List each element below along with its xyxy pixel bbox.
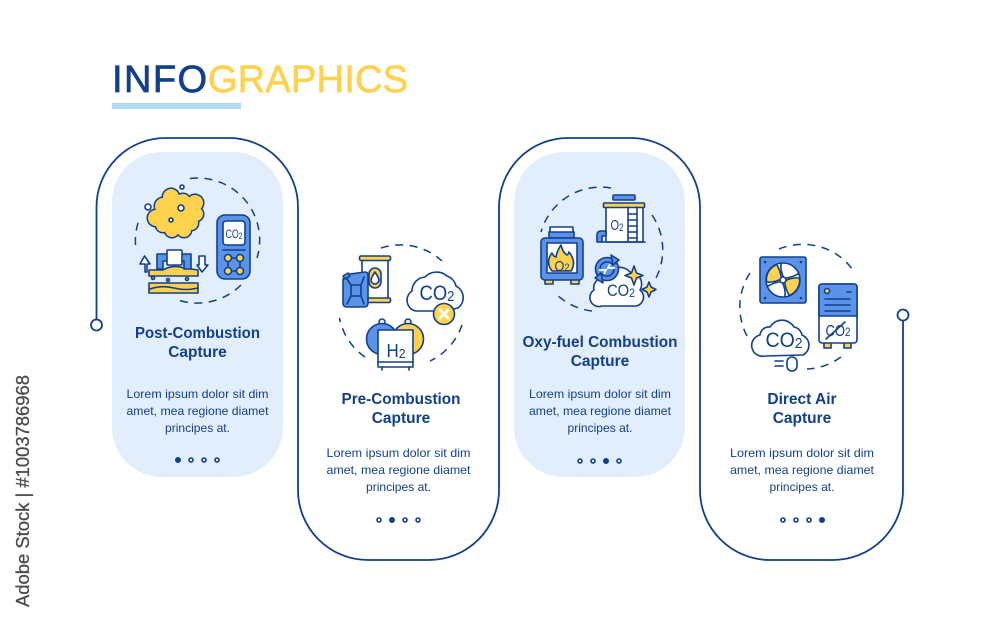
icon: fuel barrel, CO2 cloud and hydrogen tanks: CO xyxy=(420,282,451,305)
icon: oxygen tank, boiler and CO2 cloud xyxy=(541,187,663,311)
icon: oxygen tank, boiler and CO2 cloud: 2 xyxy=(564,262,570,274)
step dots xyxy=(176,458,219,462)
icon: oxygen tank, boiler and CO2 cloud: 2 xyxy=(619,222,624,234)
icon: fan, air unit and CO2 cloud: CO xyxy=(766,329,797,352)
body text xyxy=(529,387,672,435)
body text: amet, mea regione diamet xyxy=(326,463,471,477)
icon: oxygen tank, boiler and CO2 cloud: O xyxy=(610,217,622,234)
step dots xyxy=(377,518,420,522)
panel: light background oxy-fuel xyxy=(514,152,685,477)
body text: Lorem ipsum dolor sit dim xyxy=(730,446,874,460)
heading: Capture xyxy=(773,410,832,427)
icon: dust cloud, machine and CO2 meter xyxy=(135,178,260,303)
body text: principes at. xyxy=(366,480,431,494)
heading: Capture xyxy=(571,353,630,370)
heading xyxy=(135,325,260,361)
body text: Lorem ipsum dolor sit dim xyxy=(326,446,470,460)
title: GRAPHICS xyxy=(208,59,408,101)
icon: fan, air unit and CO2 cloud: CO xyxy=(826,323,850,340)
heading xyxy=(767,391,837,427)
connector outline xyxy=(91,138,908,560)
icon: oxygen tank, boiler and CO2 cloud: 2 xyxy=(629,286,635,300)
icon: fuel barrel, CO2 cloud and hydrogen tanks: H xyxy=(386,341,400,361)
body text: principes at. xyxy=(568,421,632,435)
body text xyxy=(730,446,875,494)
body text: Lorem ipsum dolor sit dim xyxy=(529,387,671,401)
step dots xyxy=(781,518,824,522)
heading: Oxy-fuel Combustion xyxy=(522,334,678,351)
icon: dust cloud, machine and CO2 meter: 2 xyxy=(239,231,242,241)
panel: light background post-combustion xyxy=(112,152,283,477)
icon: fuel barrel, CO2 cloud and hydrogen tanks: 2 xyxy=(399,346,406,361)
body text: amet, mea regione diamet xyxy=(730,463,875,477)
heading: Capture xyxy=(372,410,431,427)
body text xyxy=(126,387,269,435)
heading: Direct Air xyxy=(767,391,837,408)
step dots xyxy=(578,459,621,463)
body text xyxy=(326,446,471,494)
body text: amet, mea regione diamet xyxy=(126,404,269,418)
body text: principes at. xyxy=(165,421,230,435)
heading: Pre-Combustion xyxy=(342,391,460,408)
icon: fuel barrel, CO2 cloud and hydrogen tanks: 2 xyxy=(447,288,454,305)
step 3: oxy-fuel combustion capture xyxy=(522,187,678,463)
icon: fan, air unit and CO2 cloud xyxy=(740,244,857,371)
icon: fuel barrel, CO2 cloud and hydrogen tanks xyxy=(340,245,463,370)
icon: dust cloud, machine and CO2 meter: CO xyxy=(226,227,244,241)
heading xyxy=(342,391,460,427)
step 4: direct air capture xyxy=(730,244,875,522)
vertical stock credit: Adobe Stock | #1003786968 xyxy=(13,375,33,607)
body text: principes at. xyxy=(770,480,834,494)
body text: amet, mea regione diamet xyxy=(529,404,672,418)
body text: Lorem ipsum dolor sit dim xyxy=(126,387,268,401)
icon: oxygen tank, boiler and CO2 cloud: O xyxy=(554,258,566,275)
heading: Capture xyxy=(168,344,227,361)
step 2: pre-combustion capture xyxy=(326,245,471,522)
icon: oxygen tank, boiler and CO2 cloud: CO xyxy=(607,281,632,300)
heading xyxy=(522,334,678,370)
title: INFO xyxy=(112,59,207,101)
heading: Post-Combustion xyxy=(135,325,260,342)
icon: fan, air unit and CO2 cloud: 2 xyxy=(845,325,851,339)
step 1: post-combustion capture xyxy=(126,178,269,462)
icon: fan, air unit and CO2 cloud: 2 xyxy=(795,335,802,352)
title xyxy=(112,59,408,109)
